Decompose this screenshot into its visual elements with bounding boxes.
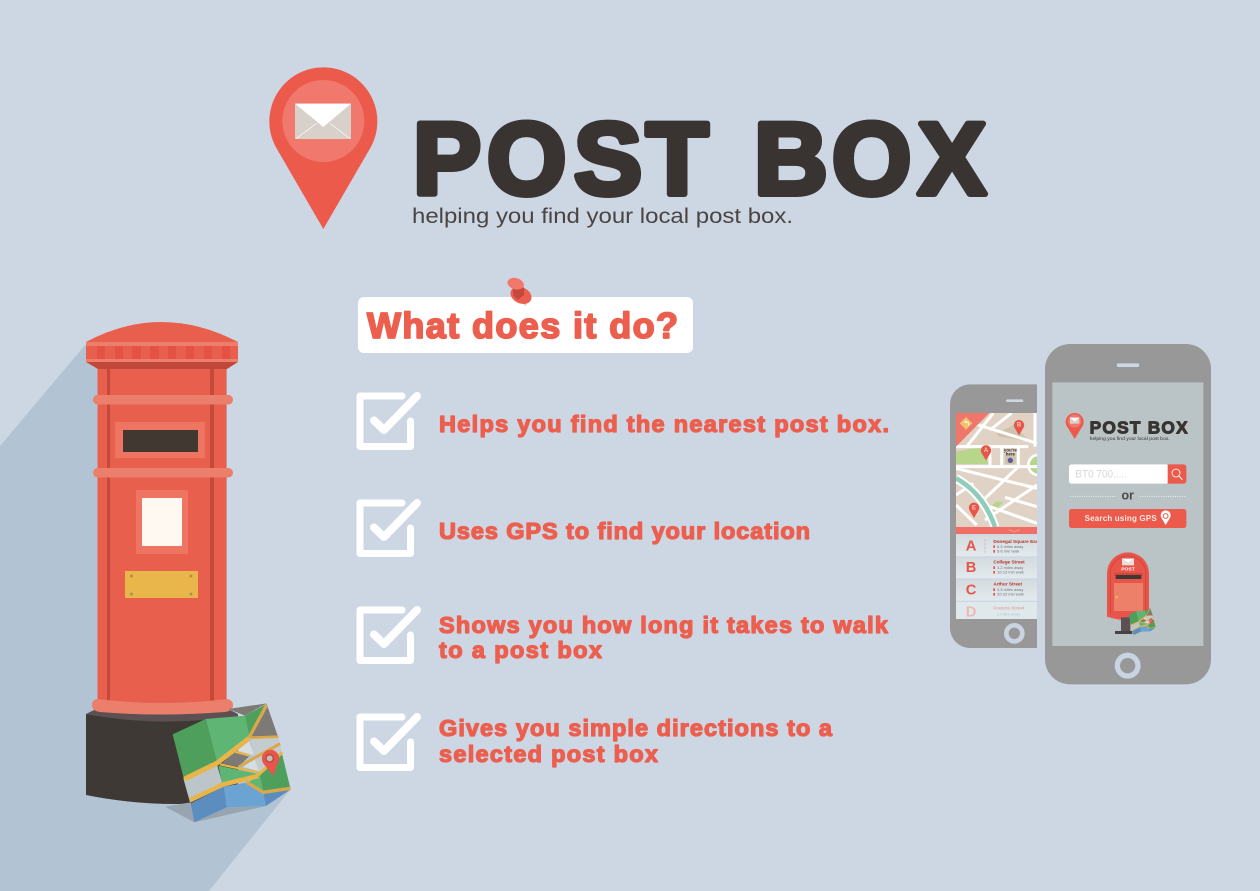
search field	[1069, 464, 1186, 484]
icon: checkbox	[360, 503, 417, 554]
row B: 1.2 miles away	[997, 565, 1023, 570]
post bottom ring	[92, 699, 233, 714]
post gold plate	[125, 571, 198, 598]
map pin A	[981, 445, 991, 460]
row C: 3.3 miles away	[997, 587, 1023, 592]
row D	[956, 602, 1037, 621]
post body	[98, 366, 226, 706]
search field: BT0 700.....	[1075, 469, 1127, 481]
post white sign	[136, 490, 188, 554]
or divider: or	[1121, 489, 1134, 503]
map screen	[956, 413, 1037, 527]
icon: checkbox	[360, 717, 417, 768]
row B: 10-13 min walk	[997, 570, 1024, 575]
tagline: helping you find your local post box.	[412, 205, 793, 228]
checklist item 4: Gives you simple directions to a	[439, 715, 833, 741]
heading card: What does it do?	[367, 305, 678, 346]
heading card	[358, 297, 693, 353]
small post box	[1107, 552, 1149, 634]
post dome	[86, 322, 238, 342]
row C: 20-33 min walk	[997, 592, 1024, 597]
GPS search button	[1069, 509, 1186, 528]
checklist item 3: Shows you how long it takes to walk	[439, 612, 889, 638]
row A: Donegal Square East	[993, 539, 1040, 544]
row C	[956, 582, 1037, 600]
checklist item 3: to a post box	[439, 637, 602, 663]
results list	[956, 534, 1040, 621]
map pin E	[969, 503, 979, 518]
map pin E: E	[972, 505, 976, 511]
map corner badge	[956, 413, 989, 447]
post box illustration	[86, 322, 238, 804]
phone screen	[1052, 382, 1203, 646]
row D: D	[966, 605, 976, 621]
checklist item 1: Helps you find the nearest post box.	[439, 411, 889, 437]
list header bar	[956, 527, 1037, 534]
row A	[956, 538, 1037, 556]
title: POST BOX	[413, 102, 986, 216]
or divider	[1070, 489, 1186, 503]
checklist item 4	[360, 715, 833, 768]
folded map	[165, 703, 291, 822]
checklist item 4: selected post box	[439, 741, 658, 767]
small post box: POST	[1121, 566, 1135, 572]
map pin A: A	[984, 448, 989, 454]
row D: 3 miles away	[997, 611, 1020, 616]
you're here marker: here	[1006, 452, 1015, 457]
checklist item 1	[360, 396, 889, 446]
row D: Francis Street	[993, 605, 1025, 610]
large phone: search view: helping you find your local post box.	[1090, 436, 1170, 441]
post base	[86, 714, 238, 804]
post letter slot	[115, 422, 205, 458]
row C: Arthur Street	[993, 582, 1022, 587]
row A: A	[966, 538, 977, 555]
long shadow	[0, 345, 290, 891]
icon: checkbox	[360, 396, 417, 446]
row A: 5-6 min walk	[997, 549, 1019, 554]
row B: College Street	[993, 560, 1025, 565]
map pin B	[1014, 420, 1024, 435]
checklist item 2: Uses GPS to find your location	[439, 518, 810, 544]
row A: 0.3 miles away	[997, 544, 1023, 549]
small folded map	[1129, 608, 1156, 635]
row B: B	[966, 560, 976, 576]
map pin B: B	[1017, 423, 1022, 429]
post rings	[93, 395, 233, 404]
small logo pin	[1066, 413, 1084, 439]
icon: checkbox	[360, 610, 417, 660]
logo pin	[269, 67, 377, 229]
you're here marker: you're	[1004, 447, 1017, 452]
checklist item 3	[360, 610, 889, 663]
large phone: search view	[1045, 344, 1211, 684]
row B	[956, 560, 1037, 578]
icon: push pin	[506, 276, 534, 307]
icon: envelope	[295, 104, 351, 139]
small phone: map view	[950, 384, 1037, 648]
checklist item 2	[360, 503, 810, 554]
GPS search button: Search using GPS	[1085, 514, 1157, 523]
you're here marker	[1004, 447, 1017, 464]
row C: C	[966, 583, 977, 599]
small logo text: POST BOX	[1090, 417, 1188, 437]
